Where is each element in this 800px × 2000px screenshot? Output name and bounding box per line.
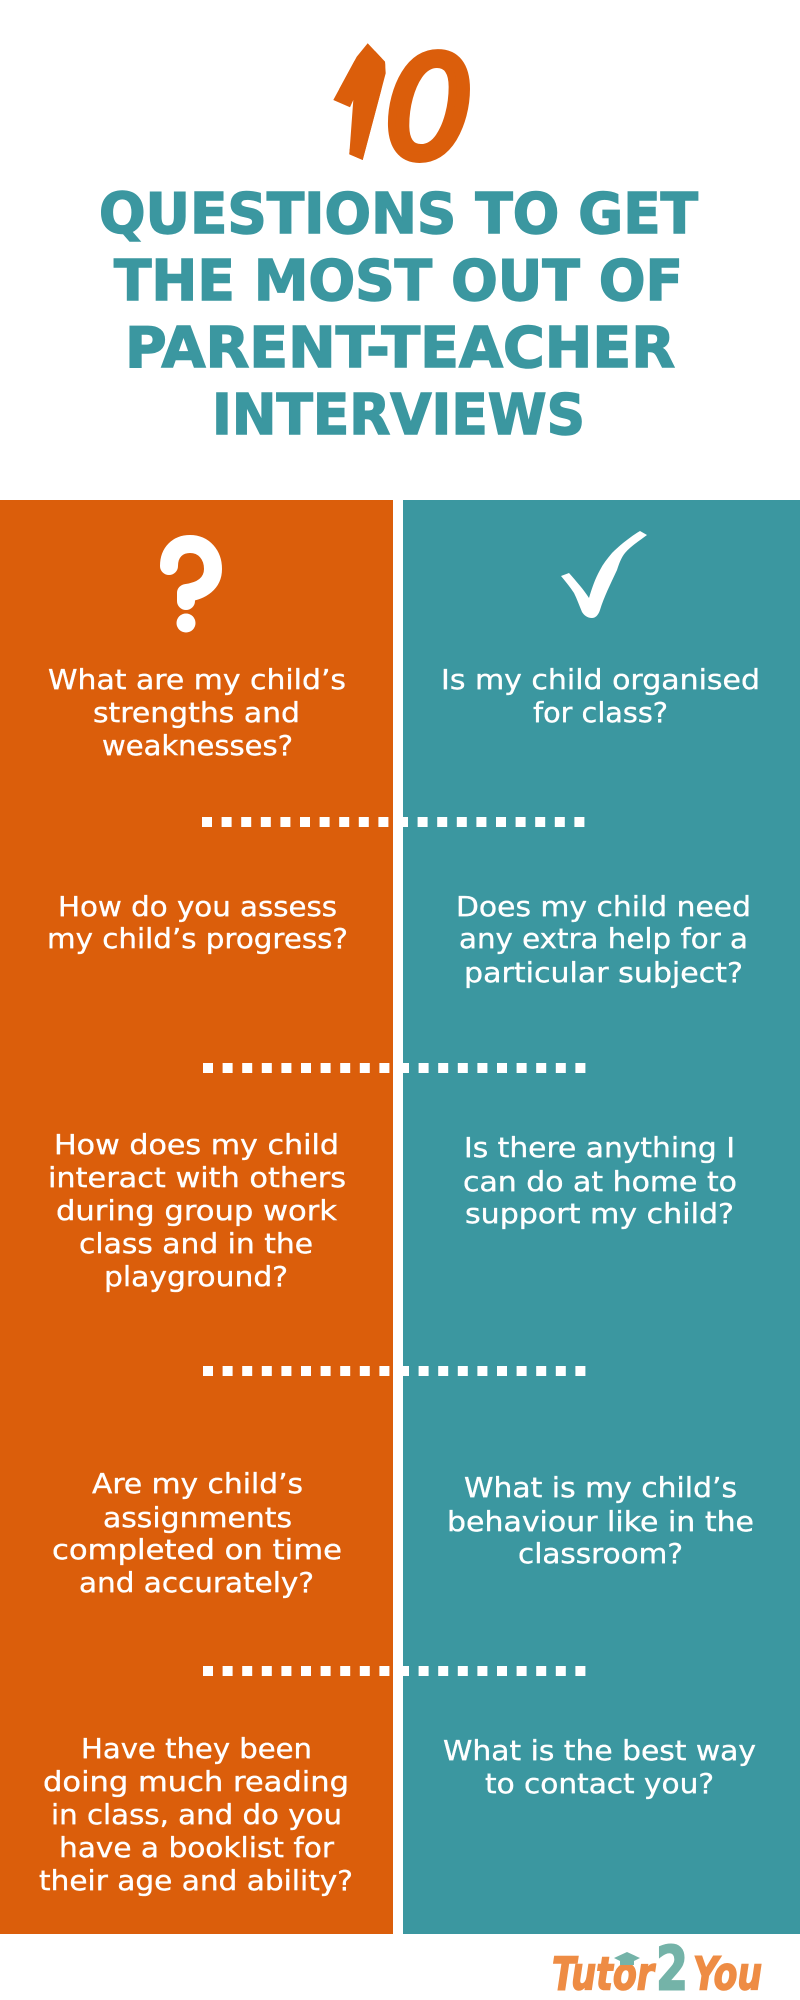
- question 4: [456, 891, 751, 989]
- question 6: support my child?: [465, 1198, 734, 1230]
- question 1: strengths and: [93, 697, 300, 729]
- icon: graduation cap: [614, 1952, 640, 1965]
- question 7: and accurately?: [79, 1567, 314, 1599]
- question 2: for class?: [533, 697, 668, 729]
- question 4: Does my child need: [456, 891, 751, 923]
- logo: Tutor2You: [552, 1934, 762, 2000]
- question 7: completed on time: [52, 1534, 342, 1566]
- question 10: What is the best way: [443, 1735, 756, 1767]
- question 4: particular subject?: [464, 957, 743, 989]
- divider row 3: [203, 1366, 586, 1376]
- question 7: Are my child’s: [92, 1468, 303, 1500]
- question 5: playground?: [104, 1261, 288, 1293]
- question 2: Is my child organised: [441, 664, 760, 696]
- panel: left orange column: [0, 500, 393, 1934]
- question 4: any extra help for a: [459, 923, 748, 955]
- question 1: [48, 664, 346, 762]
- question 1: What are my child’s: [48, 664, 346, 696]
- question 9: [39, 1733, 353, 1897]
- question 6: Is there anything I: [464, 1132, 735, 1164]
- logo: Tutor2You: You: [693, 1948, 762, 2000]
- title: THE MOST OUT OF: [114, 249, 683, 314]
- title: QUESTIONS TO GET: [99, 182, 698, 247]
- number 10: 0: [385, 28, 473, 191]
- question 6: can do at home to: [463, 1166, 737, 1198]
- number 10: [333, 43, 470, 163]
- question 9: in class, and do you: [51, 1799, 342, 1831]
- icon: check mark: [561, 531, 647, 618]
- question 8: classroom?: [518, 1538, 683, 1570]
- question 5: [48, 1129, 346, 1293]
- question 6: [463, 1132, 737, 1230]
- divider row 2: [203, 1063, 586, 1073]
- question 9: doing much reading: [43, 1766, 349, 1798]
- divider row 4: [203, 1666, 586, 1676]
- question 5: class and in the: [79, 1228, 313, 1260]
- question 10: to contact you?: [485, 1768, 714, 1800]
- title: PARENT-TEACHER: [125, 316, 675, 381]
- question 3: my child’s progress?: [47, 923, 348, 955]
- question 3: How do you assess: [58, 891, 337, 923]
- question 7: assignments: [103, 1502, 292, 1534]
- question 10: [443, 1735, 756, 1800]
- title: [99, 182, 698, 448]
- question 1: weaknesses?: [102, 730, 293, 762]
- question 5: during group work: [56, 1195, 337, 1227]
- title: INTERVIEWS: [212, 383, 585, 448]
- question 5: How does my child: [54, 1129, 339, 1161]
- divider row 1: [202, 817, 585, 827]
- question 7: [52, 1468, 342, 1599]
- question 9: their age and ability?: [39, 1865, 353, 1897]
- question 9: Have they been: [81, 1733, 312, 1765]
- question 9: have a booklist for: [59, 1832, 335, 1864]
- logo: Tutor2You: Tutor: [552, 1948, 656, 2000]
- number 10: 1: [322, 15, 402, 205]
- question 3: [47, 891, 348, 955]
- question 8: What is my child’s: [464, 1472, 737, 1504]
- question 8: [447, 1472, 754, 1570]
- panel: right teal column: [403, 500, 800, 1934]
- icon: question mark: [169, 544, 213, 632]
- question 5: interact with others: [48, 1162, 346, 1194]
- question 8: behaviour like in the: [447, 1506, 754, 1538]
- question 2: [441, 664, 760, 729]
